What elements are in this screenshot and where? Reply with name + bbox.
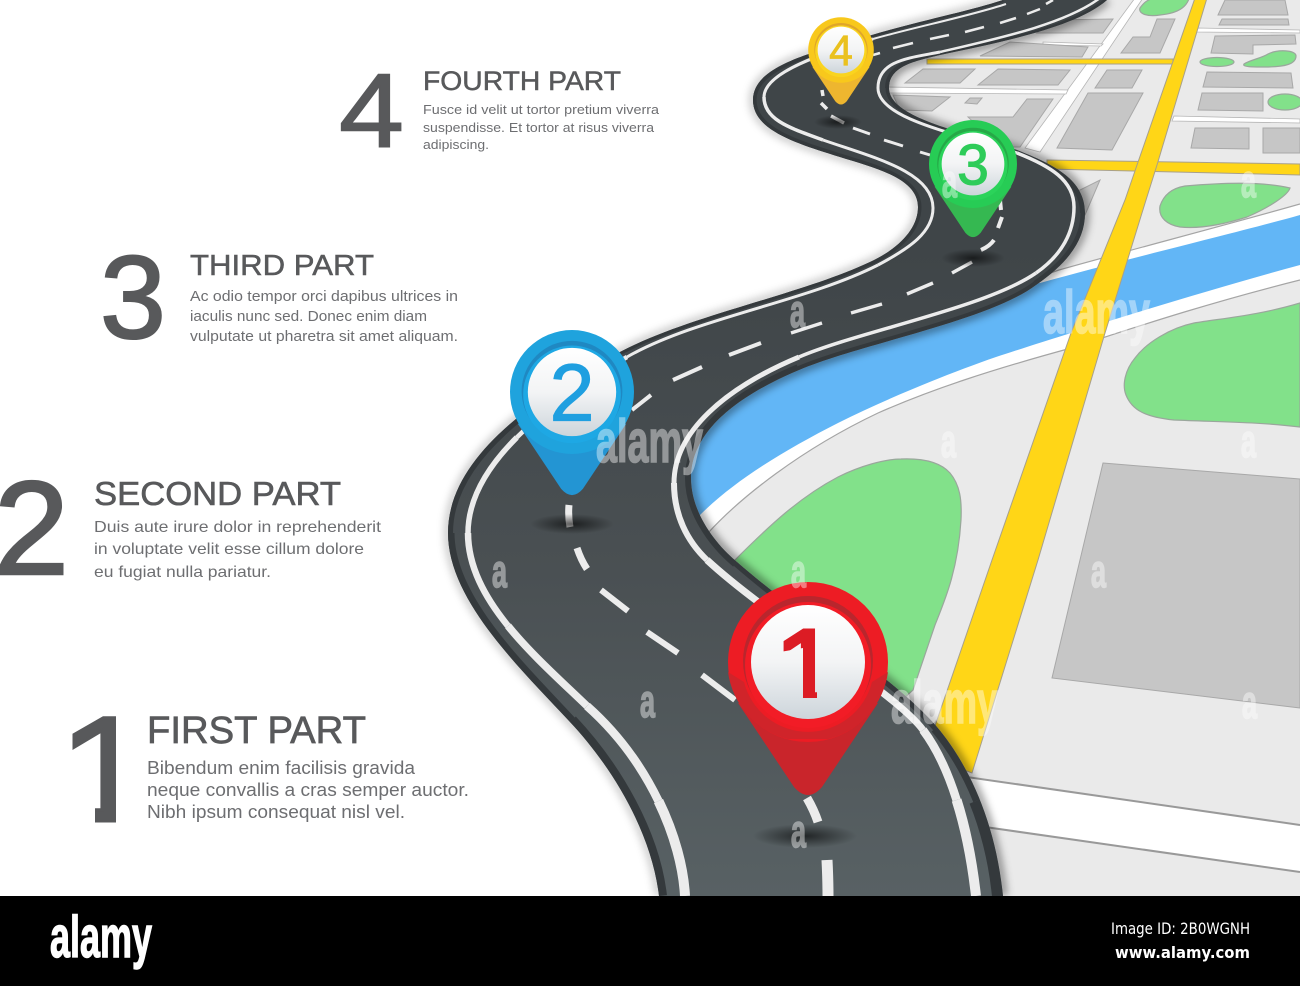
footer bar (0, 896, 1300, 986)
watermarks: alamy (891, 669, 998, 736)
number 4: 4 (339, 53, 404, 170)
alamy logo: alamy (50, 905, 152, 970)
pin ground shadows (530, 115, 1005, 848)
text: first part: Nibh ipsum consequat nisl vel. (147, 802, 405, 822)
watermarks: a (640, 675, 655, 727)
watermarks: a (1241, 155, 1256, 207)
website: www.alamy.com (1115, 943, 1250, 962)
watermarks (492, 155, 1257, 857)
text: third part (190, 289, 458, 345)
map pin 3 (green) (929, 120, 1017, 237)
watermarks: a (492, 545, 507, 597)
white city streets (885, 0, 1300, 152)
green parks (700, 0, 1300, 720)
grey city blocks (893, 0, 1300, 708)
text: third part: Ac odio tempor orci dapibus ultrices in (190, 289, 458, 305)
text: first part: Bibendum enim facilisis gravida (147, 758, 416, 778)
road shadow on the map (691, 0, 1107, 896)
text: third part: iaculis nunc sed. Donec enim diam (190, 309, 427, 325)
text: fourth part: suspendisse. Et tortor at risus viverra (423, 120, 655, 135)
watermarks: a (1242, 676, 1257, 728)
text: second part: Duis aute irure dolor in reprehenderit (94, 519, 382, 536)
number 1: 1 (57, 685, 157, 853)
watermarks: a (791, 805, 806, 857)
watermarks: a (791, 545, 806, 597)
text: fourth part (423, 102, 660, 152)
winding road (440, 0, 1120, 896)
map pin 2 (blue) (510, 330, 634, 495)
dark outer kerb (448, 0, 1107, 896)
step 4: fourth part (339, 53, 660, 170)
text: third part: vulputate ut pharetra sit amet aliquam. (190, 329, 458, 345)
watermarks: a (942, 155, 957, 207)
heading: third part: THIRD PART (190, 250, 374, 282)
text: second part: eu fugiat nulla pariatur. (94, 564, 271, 581)
yellow main roads (925, 0, 1300, 773)
river with white embankment (650, 204, 1300, 540)
text: second part (94, 519, 382, 581)
watermarks: a (1091, 545, 1106, 597)
heading: first part: FIRST PART (147, 710, 366, 752)
step 2: second part (0, 455, 382, 603)
heading: fourth part: FOURTH PART (423, 66, 621, 96)
map pin 2 (blue): 2 (550, 349, 594, 439)
text: second part: in voluptate velit esse cillum dolore (94, 541, 364, 558)
step 3: third part (100, 232, 458, 364)
step 1: first part (72, 716, 468, 822)
heading: second part: SECOND PART (94, 475, 341, 512)
text: first part (147, 758, 469, 822)
text: first part: neque convallis a cras semper auctor. (147, 780, 469, 800)
text: fourth part: adipiscing. (423, 137, 489, 152)
map pin 1 (red): 1 (775, 609, 837, 725)
watermarks: alamy (1043, 279, 1150, 346)
watermarks: a (941, 415, 956, 467)
white edge lines (468, 0, 1100, 896)
map pin 3 (green): 3 (957, 133, 989, 197)
map pin 4 (yellow): 4 (829, 27, 853, 75)
bottom white street (960, 776, 1300, 872)
watermarks: a (790, 285, 805, 337)
road shadow on the white background (448, 0, 1003, 896)
centre line dashes (569, 0, 1053, 896)
map pin 1 (red) (728, 582, 888, 795)
image id: Image ID: 2B0WGNH (1111, 919, 1250, 938)
city map (650, 0, 1300, 896)
watermarks: a (1241, 415, 1256, 467)
text: fourth part: Fusce id velit ut tortor pretium viverra (423, 102, 660, 117)
map pin 4 (yellow) (808, 17, 874, 105)
watermarks: alamy (596, 408, 703, 475)
number 3: 3 (100, 232, 166, 364)
